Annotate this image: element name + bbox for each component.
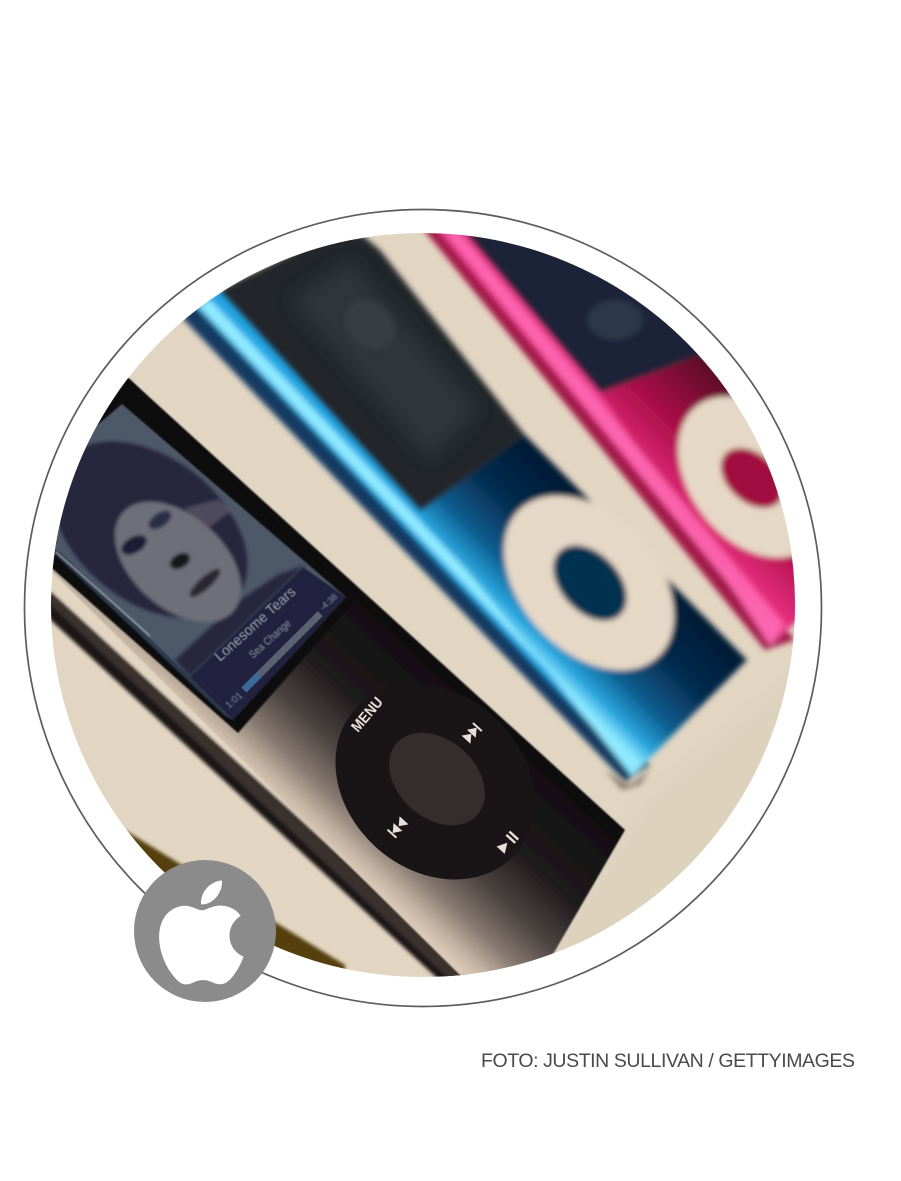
icon: apple bbox=[159, 880, 243, 984]
photo credit: FOTO: JUSTIN SULLIVAN / GETTYIMAGES bbox=[481, 1050, 855, 1072]
now playing text: Sea Change bbox=[247, 618, 294, 661]
play pause icon bbox=[496, 831, 519, 854]
shadow and table edge below black iPod bbox=[124, 826, 348, 970]
outer ring bbox=[24, 210, 822, 1006]
wheel centre button bbox=[389, 732, 485, 826]
now playing text: Lonesome Tears bbox=[212, 584, 299, 665]
photo: three iPod nanos in a circle bbox=[51, 233, 795, 977]
black iPod bbox=[19, 365, 625, 990]
blue iPod end shadow bbox=[605, 770, 650, 790]
next track icon bbox=[462, 722, 482, 744]
screen display bbox=[45, 404, 346, 720]
progress bar bbox=[241, 611, 323, 692]
screen bezel bbox=[45, 365, 354, 733]
album art face bbox=[58, 440, 305, 677]
previous track icon bbox=[387, 816, 408, 838]
click wheel bbox=[336, 690, 526, 880]
blue iPod bbox=[170, 225, 747, 782]
blue iPod screen sheen bbox=[298, 266, 474, 452]
logo badge: grey circle with apple bbox=[134, 860, 276, 1002]
pink iPod bbox=[420, 233, 795, 654]
infographic canvas bbox=[24, 208, 854, 1067]
now playing text: -4:38 bbox=[318, 592, 339, 612]
now playing text bbox=[212, 584, 339, 711]
now playing text: 1:01 bbox=[224, 690, 245, 711]
menu label: MENU bbox=[348, 694, 387, 736]
